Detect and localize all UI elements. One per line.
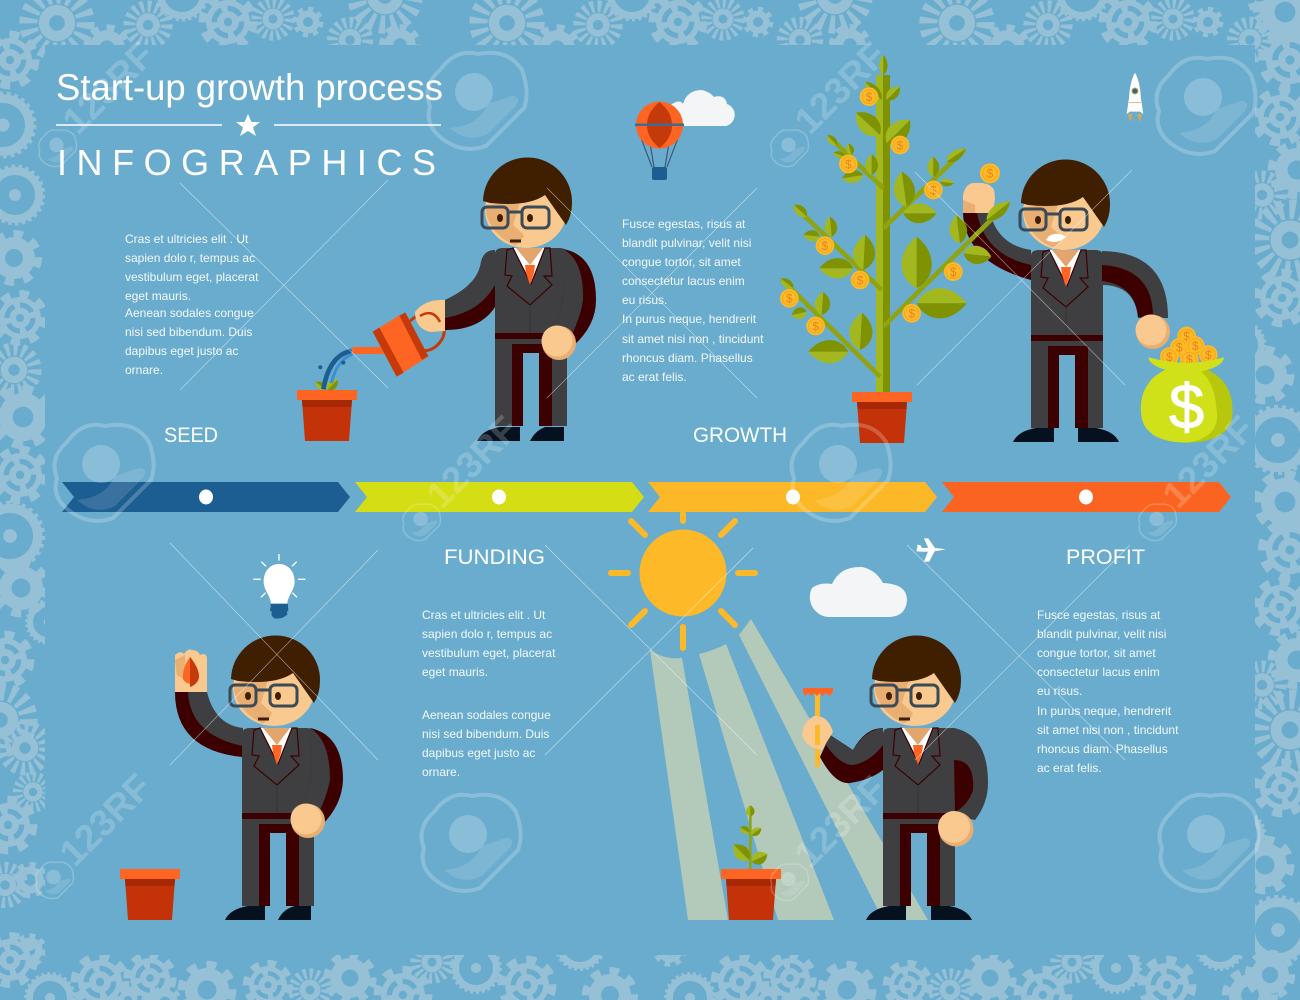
- text block: growth: Fusce egestas, risus at: [622, 217, 746, 231]
- head: [871, 635, 961, 726]
- heading: funding: FUNDING: [444, 546, 545, 569]
- empty pot: [120, 869, 180, 920]
- timeline arrows: [62, 482, 1231, 512]
- text block: growth: sit amet nisi non , tincidunt: [622, 332, 764, 346]
- text block: seed: sapien dolo r, tempus ac: [125, 251, 255, 265]
- text block: seed: ornare.: [125, 363, 163, 377]
- coins on tree: $: [908, 307, 915, 321]
- hand on can: [415, 300, 445, 332]
- text block: funding: dapibus eget justo ac: [422, 746, 535, 760]
- text block: profit: sit amet nisi non , tincidunt: [1037, 723, 1179, 737]
- hand with seed: [175, 650, 207, 692]
- text block: growth: consectetur lacus enim: [622, 274, 745, 288]
- head: [230, 635, 320, 726]
- text block: profit: ac erat felis.: [1037, 761, 1102, 775]
- coins on tree: $: [857, 273, 864, 287]
- coins in bag: [1160, 327, 1218, 369]
- text block: growth: rhoncus diam. Phasellus: [622, 351, 753, 365]
- image watermark: 123RF: [787, 768, 894, 876]
- character: watering the seed: [297, 157, 596, 441]
- resting arm: [300, 728, 343, 825]
- arrow: profit: [942, 482, 1231, 512]
- heading: growth: GROWTH: [693, 424, 787, 447]
- coins on tree: $: [987, 167, 994, 181]
- resting arm: [552, 249, 596, 346]
- text block: growth: blandit pulvinar, velit nisi: [622, 236, 751, 250]
- raised arm: [175, 692, 242, 757]
- image watermark: 123RF: [1155, 408, 1262, 516]
- image watermark: 123RF: [419, 408, 526, 516]
- image watermark: 123RF: [55, 34, 162, 142]
- coins on tree: $: [822, 239, 829, 253]
- icon: hot air balloon: [635, 102, 684, 180]
- text block: profit: congue tortor, sit amet: [1037, 646, 1156, 660]
- coins in bag: $: [1176, 341, 1183, 355]
- body: [1031, 250, 1103, 428]
- lowered arm: [1102, 251, 1168, 318]
- shoes: [866, 906, 972, 920]
- hand with rake: [802, 716, 833, 750]
- heading: profit: PROFIT: [1066, 546, 1145, 569]
- head: [482, 157, 572, 248]
- text block: growth: congue tortor, sit amet: [622, 255, 741, 269]
- text block: funding: Cras et ultricies elit . Ut: [422, 608, 546, 622]
- text block: seed: Aenean sodales congue: [125, 306, 254, 320]
- raised arm: [963, 213, 1031, 280]
- title: INFOGRAPHICS: [57, 142, 436, 183]
- coins on tree: $: [897, 138, 904, 152]
- text block: funding: ornare.: [422, 765, 460, 779]
- head: [1020, 159, 1110, 250]
- body: [883, 728, 955, 906]
- pot with plant: [721, 805, 781, 920]
- heading: seed: SEED: [164, 424, 218, 447]
- coins on tree: $: [930, 183, 937, 197]
- resting arm: [950, 728, 988, 820]
- watering can and water: [318, 312, 444, 389]
- money tree: [778, 55, 1014, 393]
- text block: funding: vestibulum eget, placerat: [422, 646, 556, 660]
- text block: profit: Fusce egestas, risus at: [1037, 608, 1161, 622]
- title: [56, 67, 443, 183]
- text block: profit: eu risus.: [1037, 684, 1082, 698]
- extended arm: [820, 728, 883, 783]
- text block: funding: sapien dolo r, tempus ac: [422, 627, 552, 641]
- body: [242, 728, 314, 906]
- text block: funding: Aenean sodales congue: [422, 708, 551, 722]
- coins in bag: $: [1166, 350, 1173, 364]
- text block: profit: In purus neque, hendrerit: [1037, 704, 1172, 718]
- arrow: funding: [355, 482, 644, 512]
- money bag: $: [1169, 373, 1204, 443]
- icon: sun: [611, 514, 755, 648]
- trunk and branches: [782, 75, 1008, 393]
- text block: profit: consectetur lacus enim: [1037, 665, 1160, 679]
- body: [495, 248, 567, 426]
- character: harvesting coins: [963, 159, 1170, 442]
- text block: seed: nisi sed bibendum. Duis: [125, 325, 252, 339]
- text block: seed: vestibulum eget, placerat: [125, 270, 259, 284]
- coins in bag: $: [1205, 348, 1212, 362]
- icon: cloud near balloon: [665, 90, 735, 127]
- text block: profit: rhoncus diam. Phasellus: [1037, 742, 1168, 756]
- sunlight beams: [650, 619, 928, 920]
- text block: seed: dapibus eget justo ac: [125, 344, 238, 358]
- leaves: [778, 55, 1014, 363]
- money bag: [1141, 327, 1233, 443]
- text block: funding: nisi sed bibendum. Duis: [422, 727, 549, 741]
- icon: light bulb: [253, 554, 305, 619]
- text block: growth: ac erat felis.: [622, 370, 687, 384]
- coins on tree: $: [950, 265, 957, 279]
- tree pot: [852, 392, 912, 443]
- arrow: seed: [62, 482, 350, 512]
- shoes: [1013, 428, 1119, 442]
- coins on tree: $: [845, 157, 852, 171]
- text block: profit: blandit pulvinar, velit nisi: [1037, 627, 1166, 641]
- coins on tree: $: [866, 90, 873, 104]
- text block: seed: eget mauris.: [125, 289, 191, 303]
- shoes: [225, 906, 311, 920]
- rake: [803, 688, 833, 767]
- coins in bag: $: [1183, 329, 1190, 343]
- text block: profit: [1037, 608, 1179, 775]
- character: holding the seed: [120, 635, 343, 920]
- title: Start-up growth process: [56, 67, 443, 108]
- text block: seed: Cras et ultricies elit . Ut: [125, 232, 249, 246]
- text block: growth: In purus neque, hendrerit: [622, 312, 757, 326]
- coins in bag: $: [1186, 353, 1193, 367]
- pot with sprout: [297, 376, 357, 441]
- character: sunlight and rake: [721, 635, 988, 920]
- text block: growth: eu risus.: [622, 293, 667, 307]
- coins on tree: $: [786, 292, 793, 306]
- shoes: [477, 427, 564, 441]
- icon: plane: [917, 538, 946, 562]
- raised fist: [963, 183, 995, 213]
- image watermark: 123RF: [787, 34, 894, 142]
- text block: funding: [422, 608, 556, 779]
- timeline dots: [199, 490, 1093, 504]
- coins on tree: [780, 87, 1000, 335]
- text block: seed: [125, 232, 259, 377]
- text block: funding: eget mauris.: [422, 665, 488, 679]
- icon: rocket: [1127, 73, 1143, 122]
- text block: growth: [622, 217, 764, 384]
- image watermark: 123RF: [52, 766, 159, 874]
- coins on tree: $: [812, 319, 819, 333]
- icon: cloud near plane: [810, 567, 907, 617]
- arrow: growth: [648, 482, 937, 512]
- pointing arm: [445, 250, 495, 330]
- coins in bag: $: [1192, 339, 1199, 353]
